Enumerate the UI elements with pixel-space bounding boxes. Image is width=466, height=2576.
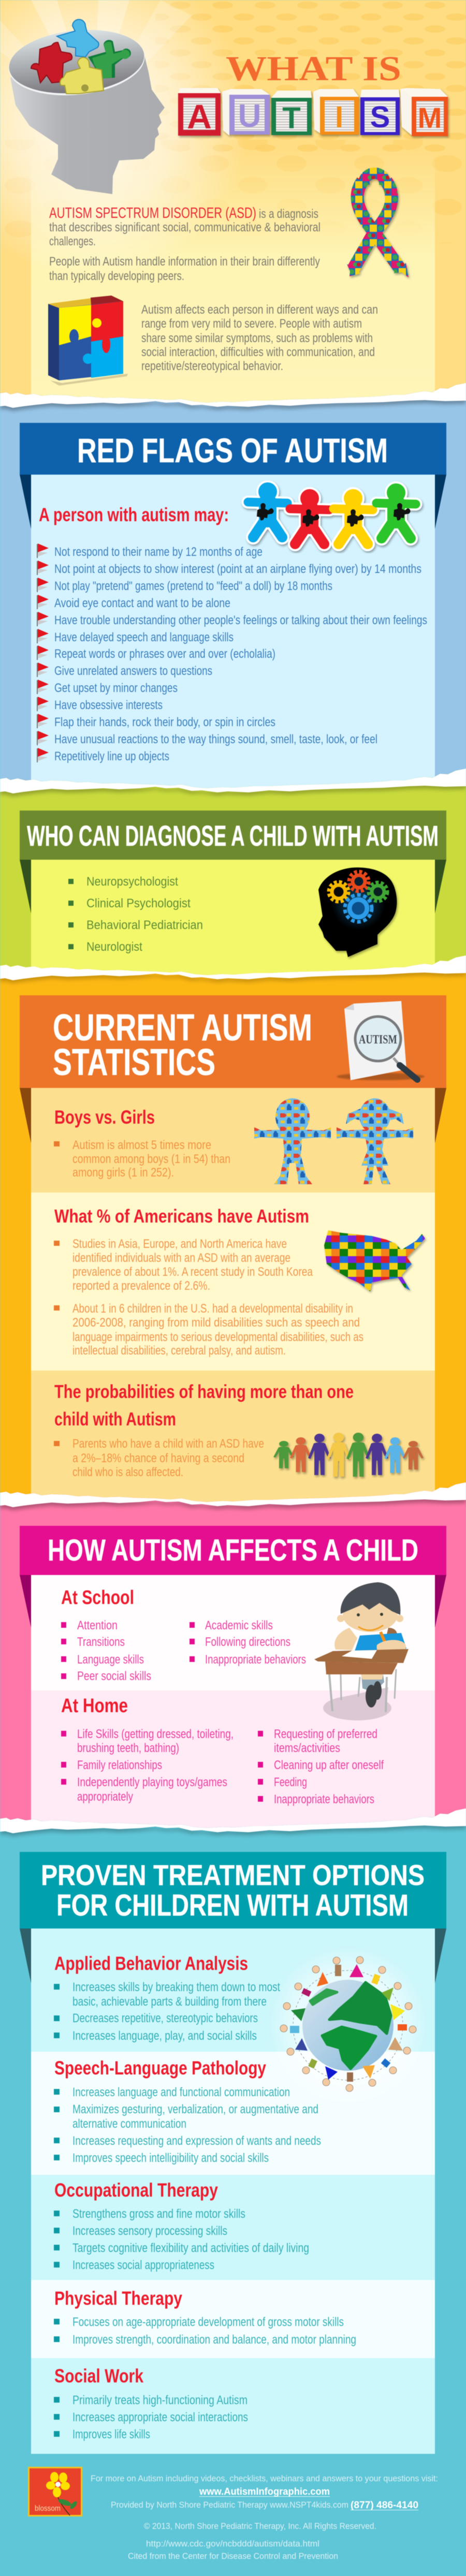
asd term and first line: AUTISM SPECTRUM DISORDER (ASD) [49, 205, 256, 222]
provided by line: Provided by North Shore Pediatric Therapy www.NSPT4kids.com [111, 2500, 348, 2510]
text: probabilities: Parents who have a child with an ASD have [72, 1437, 264, 1451]
subheading: probabilities [54, 1381, 354, 1430]
list: at school column two [190, 1618, 306, 1667]
treatment: applied behavior analysis: basic, achievable parts & building from there [72, 1995, 267, 2009]
list: red flag items: Get upset by minor changes [54, 681, 178, 695]
heading: CURRENT AUTISM [53, 1007, 312, 1049]
torn paper edge [0, 1808, 466, 1836]
list: at home column two: Feeding [274, 1775, 307, 1789]
website link: www.AutismInfographic.com [199, 2486, 330, 2497]
background: what is autism section [0, 0, 466, 466]
list: red flag items: Repeat words or phrases over and over (echolalia) [54, 647, 275, 661]
block I: I [335, 100, 343, 134]
panel: how autism affects a child [0, 1482, 466, 1843]
text: probabilities: a 2%–18% chance of having a second [72, 1451, 244, 1465]
subheading: boys vs girls: Boys vs. Girls [54, 1107, 155, 1128]
block M: M [418, 101, 442, 134]
icon: document under magnifying glass: AUTISM [359, 1033, 397, 1047]
treatment: applied behavior analysis: Decreases repetitive, stereotypic behaviors [72, 2011, 258, 2025]
footer: resources and credits: Cited from the Center for Disease Control and Prevention [128, 2551, 338, 2561]
subheading: at school: At School [61, 1587, 134, 1609]
footer: resources and credits: For more on Autism including videos, checklists, webinars and answers to your questions visit: [91, 2474, 438, 2483]
title: what is: WHAT IS [226, 49, 401, 88]
text: autism affects each person: social interaction, difficulties with communication, and [141, 345, 375, 359]
torn paper edge [0, 1482, 466, 1510]
list: at home column two [258, 1727, 384, 1806]
footer: blossom logo: blossom [35, 2504, 61, 2513]
list: red flag items: Have delayed speech and language skills [54, 630, 234, 644]
list: red flag items: Give unrelated answers to questions [54, 664, 212, 678]
list: at school column two: Academic skills [205, 1618, 273, 1632]
list: red flag items: Have unusual reactions to the way things sound, smell, taste, look, or feel [54, 732, 377, 746]
torn paper edge [0, 769, 466, 797]
panel: current autism statistics [0, 955, 466, 1511]
treatment: applied behavior analysis: Increases skills by breaking them down to most [72, 1980, 280, 1994]
text: percent of americans: intellectual disabilities, cerebral palsy, and autism. [72, 1344, 286, 1358]
block T [271, 91, 312, 135]
list: at school column two: Following directions [205, 1635, 290, 1649]
list: at school column one: Attention [77, 1618, 118, 1632]
text: autism affects each person: repetitive/stereotypical behavior. [141, 359, 283, 373]
list: at school column one [61, 1618, 151, 1683]
treatment: speech-language pathology [54, 2057, 321, 2165]
text: boys vs girls: Autism is almost 5 times more [72, 1138, 211, 1152]
heading [53, 1007, 312, 1083]
list: specialists [68, 875, 203, 954]
text: asd definition: than typically developing peers. [49, 269, 184, 283]
block S [360, 90, 400, 135]
block A: A [187, 97, 212, 136]
list: red flag items: Avoid eye contact and want to be alone [54, 596, 230, 610]
list: at school column one: Language skills [77, 1653, 144, 1667]
list: at home column two: Requesting of preferred [274, 1727, 377, 1741]
block U: U [238, 98, 261, 134]
footer: blossom logo [29, 2468, 82, 2515]
list: red flag items: Not play "pretend" games (pretend to "feed" a doll) by 18 months [54, 579, 332, 593]
treatment: social work: Increases appropriate social interactions [72, 2410, 248, 2424]
icon: globe with children around [268, 1945, 428, 2106]
list: at home column one: brushing teeth, bathing) [77, 1741, 179, 1755]
text: asd definition [49, 205, 321, 283]
list: red flag items: Flap their hands, rock their body, or spin in circles [54, 715, 275, 729]
treatment: occupational therapy: Targets cognitive flexibility and activities of daily living [72, 2241, 309, 2255]
footer: resources and credits: © 2013, North Shore Pediatric Therapy, Inc. All Rights Reserved. [144, 2521, 376, 2531]
treatment: occupational therapy: Increases social appropriateness [72, 2258, 214, 2272]
list: at home column two: Inappropriate behaviors [274, 1792, 374, 1806]
subheading: at home: At Home [61, 1695, 128, 1717]
block A [178, 88, 221, 136]
text: autism affects each person: Autism affects each person in different ways and can [141, 303, 378, 317]
text: percent of americans: prevalence of about 1%. A recent study in South Korea [72, 1265, 313, 1279]
text: probabilities [54, 1437, 264, 1479]
torn paper edge [0, 383, 466, 411]
text: boys vs girls: common among boys (1 in 54) than [72, 1152, 230, 1166]
treatment: speech-language pathology: Improves speech intelligibility and social skills [72, 2151, 269, 2165]
icon: four paper children [248, 482, 416, 544]
text: percent of americans: 2006-2008, ranging from mild disabilities such as speech and [72, 1316, 360, 1330]
gear yellow [329, 882, 348, 902]
block S: S [370, 100, 390, 134]
asd term and first line: is a diagnosis [259, 207, 318, 221]
heading: RED FLAGS OF AUTISM [77, 431, 388, 469]
block U [222, 89, 270, 136]
list: specialists: Neurologist [86, 940, 142, 954]
panel: proven treatment options [0, 1808, 466, 2576]
section background with torn edge [0, 1808, 466, 2576]
title: letter blocks spelling AUTISM [178, 88, 448, 136]
icon: puzzle awareness ribbon [347, 173, 409, 277]
subheading: Social Work [54, 2365, 143, 2387]
icon: puzzle map of usa [324, 1230, 425, 1291]
treatment: applied behavior analysis [54, 1953, 280, 2043]
subheading: Physical Therapy [54, 2288, 182, 2309]
list: at home column one: Independently playing toys/games [77, 1775, 227, 1789]
list: at school column two: Inappropriate behaviors [205, 1653, 306, 1667]
text: boys vs girls [54, 1138, 230, 1180]
torn paper edge [0, 955, 466, 983]
text: autism affects each person [141, 303, 378, 373]
heading: STATISTICS [53, 1042, 215, 1083]
treatment: speech-language pathology: Increases requesting and expression of wants and needs [72, 2134, 321, 2148]
text: autism affects each person: share some similar symptoms, such as problems with [141, 331, 373, 345]
gear red [349, 872, 369, 891]
subheading: Occupational Therapy [54, 2180, 218, 2201]
text: autism affects each person: range from very mild to severe. People with autism [141, 317, 362, 331]
list: at home column one: Life Skills (getting dressed, toileting, [77, 1727, 234, 1741]
block I [313, 89, 359, 135]
icon: row of colorful people [273, 1433, 424, 1477]
section background with torn edge [0, 383, 466, 838]
treatment: occupational therapy: Increases sensory processing skills [72, 2224, 227, 2238]
treatment: applied behavior analysis: Increases language, play, and social skills [72, 2029, 257, 2043]
text: asd definition: People with Autism handle information in their brain differently [49, 255, 320, 269]
section background with torn edge [0, 1482, 466, 1843]
panel: who can diagnose [0, 769, 466, 994]
list: red flag items [37, 543, 427, 763]
list: red flag items: Have obsessive interests [54, 698, 163, 712]
treatment: physical therapy: Improves strength, coordination and balance, and motor planning [72, 2333, 356, 2347]
icon: head silhouette with gears [318, 867, 397, 957]
list: at home column two: Cleaning up after oneself [274, 1758, 384, 1772]
list: at school column one: Peer social skills [77, 1669, 151, 1683]
subheading: probabilities: The probabilities of having more than one [54, 1381, 354, 1402]
treatment: social work: Improves life skills [72, 2427, 150, 2441]
text: probabilities: child who is also affected. [72, 1465, 183, 1479]
treatment: social work [54, 2365, 248, 2441]
icon: document under magnifying glass [337, 1001, 425, 1080]
text: percent of americans: Studies in Asia, Europe, and North America have [72, 1237, 287, 1251]
treatment: speech-language pathology: Increases language and functional communication [72, 2085, 290, 2099]
list: specialists: Behavioral Pediatrician [86, 918, 203, 932]
list: specialists: Clinical Psychologist [86, 896, 191, 910]
text: percent of americans: About 1 in 6 children in the U.S. had a developmental disability in [72, 1302, 353, 1316]
list: at home column one: appropriately [77, 1790, 133, 1804]
text: percent of americans: identified individuals with an ASD with an average [72, 1251, 290, 1265]
subheading: what percent: What % of Americans have Autism [54, 1205, 309, 1227]
footer: resources and credits: http://www.cdc.gov/ncbddd/autism/data.html [146, 2539, 319, 2549]
treatment: physical therapy [54, 2288, 356, 2347]
list: specialists: Neuropsychologist [86, 875, 178, 889]
subheading: probabilities: child with Autism [54, 1408, 176, 1430]
section background with torn edge [0, 769, 466, 994]
text: asd definition: challenges. [49, 234, 96, 248]
list: red flag items: Not respond to their name by 12 months of age [54, 545, 263, 559]
list: red flag items: Repetitively line up objects [54, 749, 169, 763]
icon: puzzle boy and girl [254, 1098, 413, 1184]
block T: T [282, 101, 301, 135]
subheading: Applied Behavior Analysis [54, 1953, 248, 1974]
text: asd definition: that describes significant social, communicative & behavioral [49, 220, 321, 234]
heading [41, 1859, 425, 1922]
icon: boy at school desk [314, 1582, 409, 1720]
text: percent of americans: language impairments to serious developmental disabilities, such as [72, 1330, 363, 1344]
treatment: physical therapy: Focuses on age-appropriate development of gross motor skills [72, 2315, 344, 2329]
list: at home column one: Family relationships [77, 1758, 162, 1772]
text: percent of americans [54, 1237, 363, 1358]
treatment: occupational therapy [54, 2180, 309, 2272]
section background with torn edge [0, 955, 466, 1511]
list: at home column two: items/activities [274, 1741, 340, 1755]
footer: resources and credits [91, 2474, 438, 2561]
treatment: social work: Primarily treats high-functioning Autism [72, 2393, 247, 2407]
puzzle boy [254, 1098, 331, 1184]
treatment: occupational therapy: Strengthens gross and fine motor skills [72, 2207, 245, 2221]
subheading: Speech-Language Pathology [54, 2057, 266, 2079]
list: at home column one [61, 1727, 234, 1804]
treatment: speech-language pathology: alternative communication [72, 2117, 186, 2131]
provided by line: (877) 486-4140 [351, 2500, 418, 2511]
text: percent of americans: reported a prevalence of 2.6%. [72, 1279, 210, 1293]
panel: red flags of autism [0, 383, 466, 838]
gear green [369, 882, 387, 901]
treatment: speech-language pathology: Maximizes gesturing, verbalization, or augmentative and [72, 2102, 318, 2116]
block M [400, 88, 448, 136]
gear blue [345, 895, 372, 922]
head with puzzle pieces icon [5, 20, 165, 194]
puzzle girl [337, 1098, 413, 1184]
icon: 3d puzzle block [48, 296, 128, 386]
list: at school column one: Transitions [77, 1635, 125, 1649]
subheading: A person with autism may: [39, 504, 229, 525]
text: boys vs girls: among girls (1 in 252). [72, 1166, 174, 1180]
